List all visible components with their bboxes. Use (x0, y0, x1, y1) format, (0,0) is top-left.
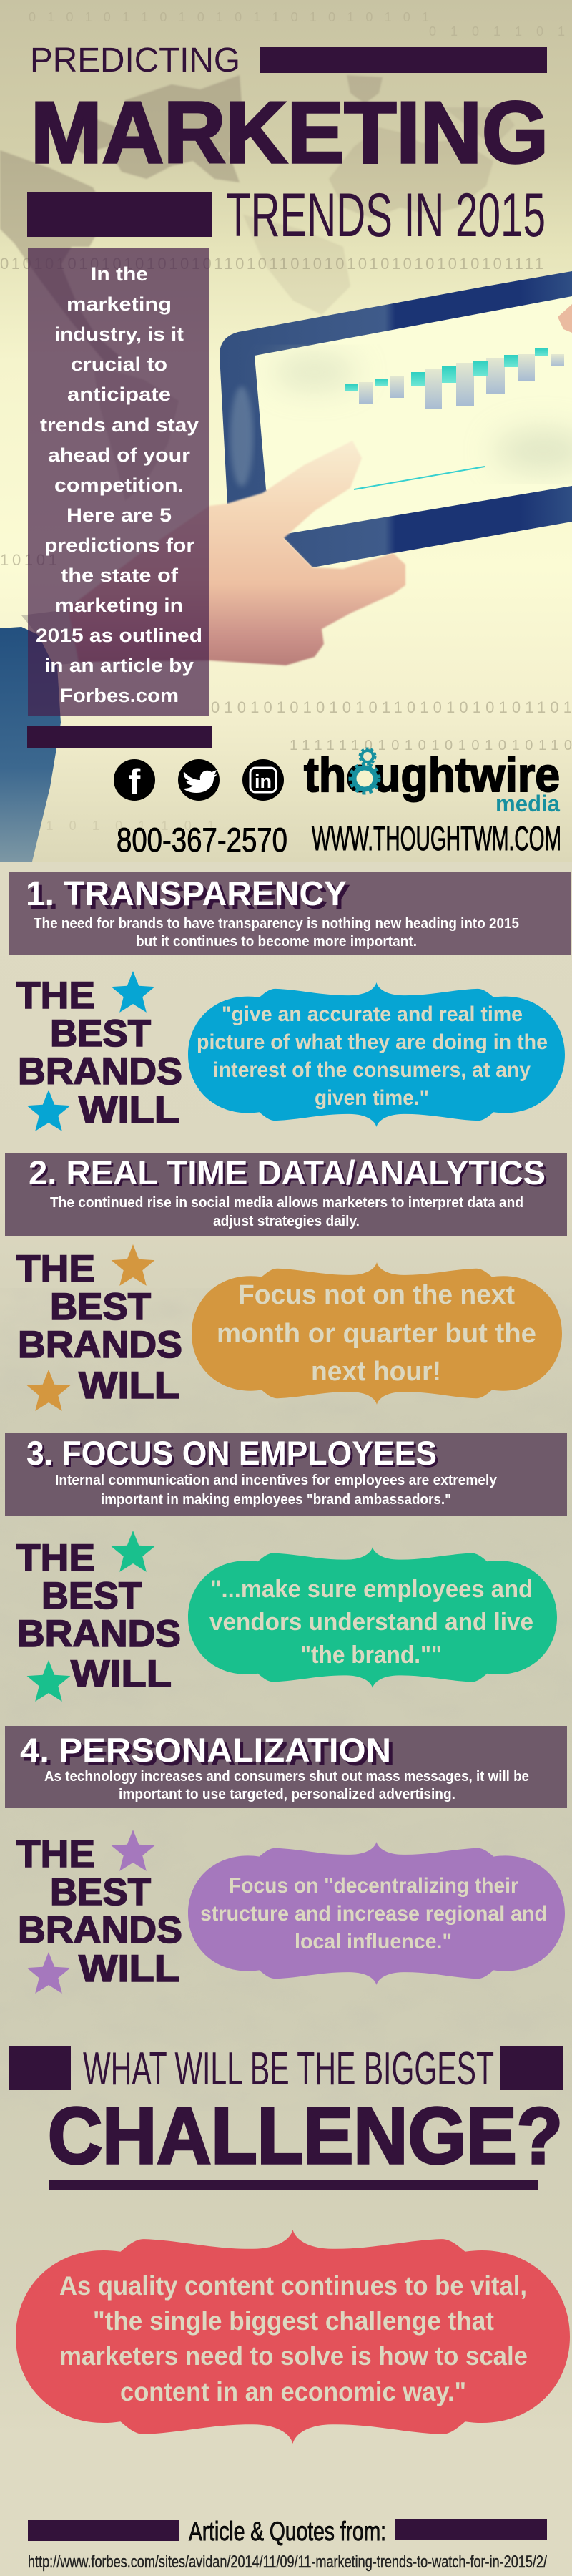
callout text: Focus not on the next (238, 1280, 515, 1310)
icon: star (112, 971, 154, 1013)
callout text: month or quarter but the (217, 1319, 536, 1349)
bar under intro (27, 726, 212, 748)
icon: facebook (114, 759, 155, 802)
description: important to use targeted, personalized advertising. (119, 1787, 455, 1802)
the best brands will 1 (16, 971, 182, 1131)
callout: blue bubble (188, 982, 565, 1127)
intro paragraph: anticipate (67, 384, 171, 405)
description: important in making employees "brand ambassadors." (101, 1492, 451, 1508)
callout text: "...make sure employees and (210, 1576, 533, 1603)
description (34, 916, 519, 950)
binary digit rows: 0101010101010110101010101101 (211, 698, 572, 716)
icon: star (27, 1952, 70, 1994)
panel: 2 real time data (5, 1153, 567, 1236)
phone number: 800-367-2570 (117, 821, 287, 859)
callout text (209, 1576, 533, 1669)
the best brands will 2: WILL (79, 1365, 179, 1407)
the best brands will 3: THE (16, 1537, 95, 1579)
description: The continued rise in social media allows marketers to interpret data and (50, 1195, 523, 1211)
description (55, 1473, 498, 1508)
title bar left (27, 192, 212, 237)
callout text: "the single biggest challenge that (93, 2306, 494, 2336)
intro paragraph: the state of (61, 565, 179, 586)
screen shading (272, 356, 572, 472)
shirt cuff (21, 608, 86, 665)
callout: red bubble (16, 2230, 570, 2444)
callout: green bubble (188, 1547, 557, 1688)
panel: 3 focus on employees (5, 1433, 567, 1516)
callout: purple bubble (188, 1842, 565, 1985)
intro paragraph (36, 263, 202, 706)
frame highlight (230, 386, 253, 487)
the best brands will 1: THE (16, 975, 95, 1017)
binary digit rows: 0101010101010101010110101101010101010101010101111 (0, 255, 543, 273)
the best brands will 3 (16, 1531, 181, 1702)
description: As technology increases and consumers shut out mass messages, it will be (44, 1769, 529, 1785)
intro paragraph: in an article by (44, 655, 194, 676)
title: predicting: PREDICTING (30, 42, 240, 79)
intro paragraph: 2015 as outlined (36, 625, 202, 646)
intro paragraph: predictions for (44, 535, 195, 556)
description: adjust strategies daily. (213, 1214, 360, 1229)
binary digit columns: 0 1 0 1 1 0 1 (429, 24, 565, 39)
callout text (197, 1002, 548, 1110)
heading: 2. REAL TIME DATA/ANALYTICS (29, 1153, 546, 1191)
binary digit rows: 10101 (0, 551, 57, 569)
callout text: interest of the consumers, at any (213, 1058, 531, 1082)
intro paragraph: Here are 5 (66, 504, 172, 526)
description (44, 1769, 529, 1802)
callout text: structure and increase regional and (200, 1902, 547, 1926)
callout text: content in an economic way." (120, 2377, 466, 2406)
callout text: "the brand."" (300, 1641, 442, 1669)
title: marketing: MARKETING (31, 84, 548, 181)
icon: star (112, 1830, 154, 1871)
callout text: As quality content continues to be vital, (59, 2271, 527, 2301)
the best brands will 2: BEST (50, 1286, 151, 1328)
intro paragraph: marketing (66, 293, 172, 315)
description (50, 1195, 523, 1229)
heading: 4. PERSONALIZATION (20, 1731, 391, 1769)
icon: twitter (178, 759, 220, 801)
the best brands will 4 (16, 1830, 182, 1994)
callout text: marketers need to solve is how to scale (59, 2341, 528, 2371)
callout text (217, 1280, 536, 1387)
the best brands will 2: THE (16, 1248, 95, 1290)
callout text: given time." (315, 1086, 429, 1110)
pointing hand (68, 441, 405, 665)
logo: thoughtwire media: media (495, 791, 560, 816)
intro paragraph: In the (91, 263, 148, 285)
challenge heading (9, 2042, 563, 2190)
heading: 1. TRANSPARENCY (26, 875, 347, 913)
icon: linkedin (242, 759, 284, 801)
intro text panel (28, 248, 209, 716)
tablet (220, 271, 572, 567)
intro paragraph: ahead of your (48, 444, 191, 466)
icon: star (27, 1090, 70, 1131)
the best brands will 2: BRANDS (18, 1324, 182, 1366)
icon: star (27, 1370, 70, 1411)
intro paragraph: industry, is it (54, 323, 184, 345)
icon: facebook: f (129, 762, 141, 802)
lower page background (0, 862, 572, 2576)
shirt sleeve (0, 627, 61, 862)
callout text (200, 1874, 547, 1953)
callout: orange bubble (192, 1262, 562, 1405)
tablet screen (255, 296, 572, 534)
panel: 1 transparency (9, 872, 571, 955)
callout text: vendors understand and live (209, 1609, 533, 1636)
callout text: Focus on "decentralizing their (229, 1874, 518, 1898)
binary digit rows (0, 255, 572, 753)
binary digit columns: 0 1 1 0 1 0 1 1 0 1 (0, 819, 214, 833)
icon: linkedin: in (255, 771, 272, 792)
icon: star (112, 1531, 154, 1572)
the best brands will 3: BEST (41, 1575, 142, 1617)
icon: star (27, 1660, 70, 1702)
description: Internal communication and incentives for employees are extremely (55, 1473, 498, 1488)
the best brands will 4: THE (16, 1833, 95, 1875)
the best brands will 4: BEST (50, 1871, 151, 1913)
icon: star (112, 1244, 154, 1286)
intro paragraph: trends and stay (40, 414, 199, 436)
panel: 4 personalization (5, 1726, 567, 1808)
the best brands will 1: WILL (79, 1089, 179, 1131)
binary digit rows: 1111110101010101010110 (290, 738, 572, 753)
the best brands will 1: BRANDS (18, 1050, 182, 1093)
finger at tablet edge (558, 304, 572, 333)
source heading (28, 2517, 547, 2546)
heading: 3. FOCUS ON EMPLOYEES (26, 1434, 437, 1472)
title bar right (260, 47, 547, 73)
the best brands will 3: WILL (71, 1653, 172, 1695)
callout text: "give an accurate and real time (222, 1002, 523, 1026)
callout text: picture of what they are doing in the (197, 1030, 548, 1054)
the best brands will 2 (16, 1244, 182, 1411)
intro paragraph: competition. (54, 474, 184, 496)
description: The need for brands to have transparency is nothing new heading into 2015 (34, 916, 519, 932)
intro paragraph: Forbes.com (60, 685, 179, 706)
intro paragraph: marketing in (55, 595, 183, 616)
the best brands will 1: BEST (50, 1013, 151, 1055)
binary digit columns: 0 1 0 1 0 1 1 0 1 0 1 0 1 1 0 1 0 1 0 1 0 1 (29, 10, 429, 24)
description: but it continues to become more important. (136, 934, 417, 950)
binary digit columns (0, 10, 565, 833)
callout text: next hour! (311, 1357, 441, 1387)
hero photo panel (0, 0, 572, 862)
intro paragraph: crucial to (71, 353, 167, 375)
screen chart (345, 348, 564, 489)
the best brands will 4: BRANDS (18, 1909, 182, 1951)
icon: gears (350, 748, 379, 793)
callout text (59, 2271, 528, 2406)
the best brands will 3: BRANDS (17, 1613, 181, 1655)
callout text: local influence." (295, 1930, 452, 1953)
the best brands will 4: WILL (79, 1948, 179, 1990)
world map backdrop (0, 75, 515, 501)
background texture (0, 1288, 572, 2111)
source heading: Article & Quotes from: (189, 2517, 386, 2546)
